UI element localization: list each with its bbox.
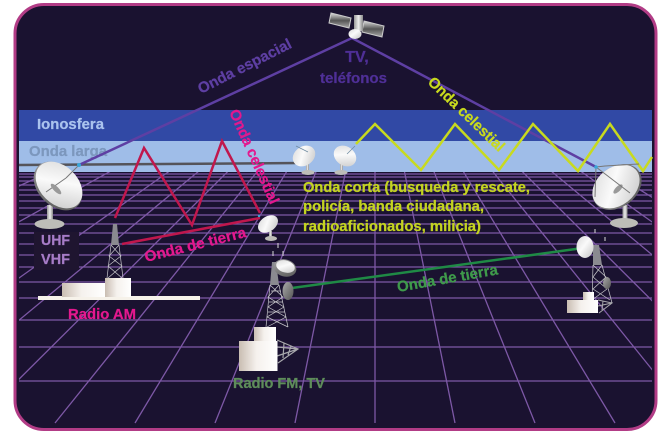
yellow sky-wave zigzag bbox=[356, 124, 652, 171]
icon: satellite bbox=[329, 13, 384, 39]
icon: left dish bbox=[24, 152, 92, 229]
label: TV, teléfonos: teléfonos bbox=[320, 70, 387, 87]
purple space-wave path bbox=[79, 38, 596, 167]
icon: FM/TV tower and building bbox=[239, 243, 298, 371]
label: Onda celestial yellow: Onda celestial bbox=[424, 74, 508, 155]
label: Onda de tierra green: Onda de tierra bbox=[396, 261, 500, 296]
label: Onda larga: Onda larga bbox=[29, 143, 108, 160]
label: Onda celestial magenta: Onda celestial bbox=[225, 107, 282, 207]
icon: small dish on receiver bbox=[255, 212, 281, 241]
label: Onda de tierra magenta: Onda de tierra bbox=[143, 224, 249, 266]
label: Radio AM: Radio AM bbox=[68, 306, 136, 323]
label: UHF VHF: UHF bbox=[41, 232, 70, 249]
label: UHF VHF: VHF bbox=[41, 251, 70, 268]
label: TV, teléfonos bbox=[320, 49, 387, 87]
red sky-wave zigzag bbox=[115, 141, 260, 225]
icon: right tower and building bbox=[567, 229, 612, 313]
label: Onda corta: policía, banda ciudadana, bbox=[303, 198, 484, 215]
red ground wave bbox=[122, 218, 260, 244]
label: UHF VHF bbox=[34, 232, 79, 270]
green ground wave bbox=[292, 248, 583, 288]
ionosphere band bbox=[19, 110, 652, 141]
icon: AM tower and building bbox=[38, 224, 200, 300]
icon: middle dish right bbox=[330, 141, 360, 175]
icon: right dish bbox=[583, 155, 651, 228]
icon: middle dish left bbox=[289, 141, 319, 175]
long wave band bbox=[19, 141, 652, 172]
label: Onda corta: Onda corta (busqueda y rescate, bbox=[303, 179, 530, 196]
label: Onda corta bbox=[303, 179, 530, 235]
label: Onda espacial: Onda espacial bbox=[195, 36, 295, 98]
label: TV, teléfonos: TV, bbox=[345, 49, 369, 66]
label: Ionosfera: Ionosfera bbox=[37, 116, 105, 133]
label: Radio FM, TV: Radio FM, TV bbox=[233, 375, 325, 392]
grey long-wave line bbox=[19, 163, 300, 165]
label: Onda corta: radioaficionados, milicia) bbox=[303, 218, 481, 235]
